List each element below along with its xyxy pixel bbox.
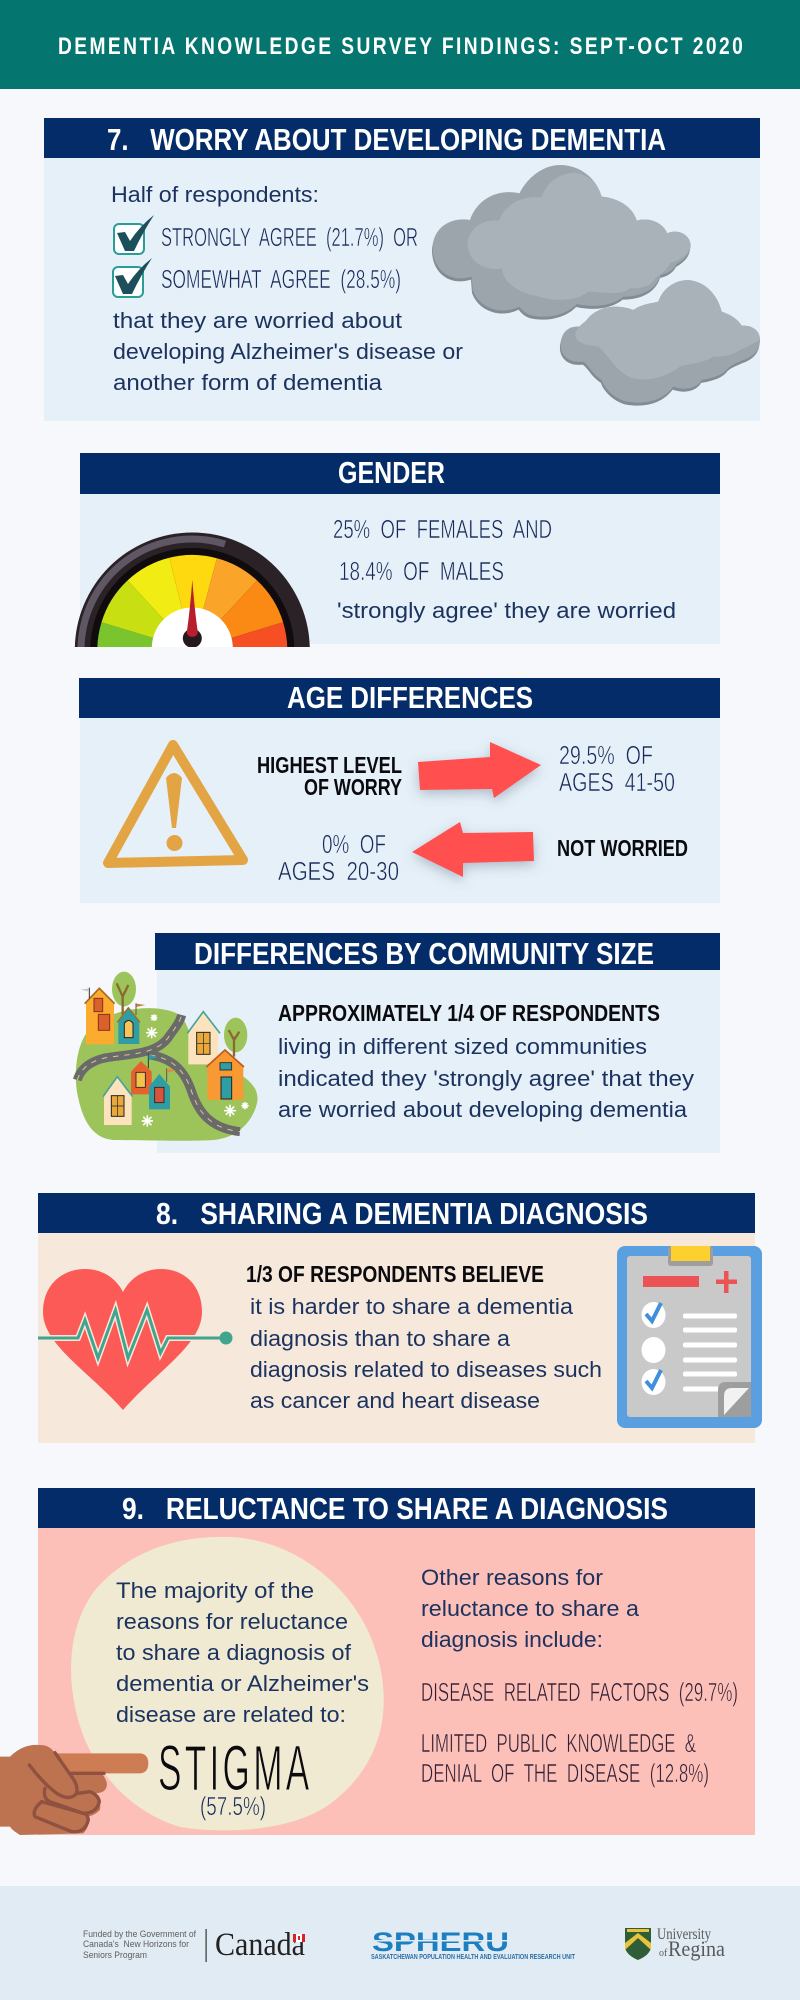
- panel: community size: [76, 933, 720, 1153]
- tree 1: [112, 972, 136, 1006]
- logo: Government of Canada: Canada: [215, 1927, 305, 1963]
- teal house: [118, 1008, 139, 1044]
- text: approximately 1/4: APPROXIMATELY 1/4 OF RESPONDENTS: [278, 1000, 660, 1026]
- text: worried about developing: [113, 308, 464, 395]
- text: majority of reasons: to share a diagnosis of: [116, 1640, 352, 1665]
- text: other reasons: Other reasons for: [421, 1565, 604, 1590]
- text: gender percentages: 18.4% OF MALES: [339, 556, 504, 586]
- logo: Government of Canada: Seniors Program: [83, 1950, 147, 1961]
- heading: section 7: 7. WORRY ABOUT DEVELOPING DEMENTIA: [107, 122, 666, 157]
- text: strongly agree: STRONGLY AGREE (21.7%) OR: [161, 222, 418, 252]
- panel: reluctance to share a diagnosis: [0, 1488, 755, 1835]
- text: diagnosis description: [250, 1294, 602, 1413]
- callout: stigma blob: [71, 1537, 384, 1830]
- heading: age differences: AGE DIFFERENCES: [287, 680, 533, 715]
- text: majority of reasons: reasons for reluctance: [116, 1609, 348, 1634]
- text: ages 20-30: AGES 20-30: [278, 856, 399, 886]
- heading: section 9: 9. RELUCTANCE TO SHARE A DIAGNOSIS: [122, 1491, 668, 1526]
- text: other reasons: reluctance to share a: [421, 1596, 640, 1621]
- title: DEMENTIA KNOWLEDGE SURVEY FINDINGS: SEPT-OCT 2020: [58, 32, 743, 60]
- logo: University of Regina: of: [659, 1948, 668, 1959]
- text: somewhat agree: SOMEWHAT AGREE (28.5%): [161, 264, 401, 294]
- text: gender percentages: 25% OF FEMALES AND: [333, 514, 552, 544]
- text: majority of reasons: The majority of the: [116, 1578, 314, 1603]
- arrow: right: [418, 742, 541, 798]
- flag and red house: [147, 1053, 150, 1068]
- text: worried about developing: that they are worried about: [113, 308, 403, 333]
- panel: worry about developing dementia: [44, 118, 760, 421]
- header banner: [0, 0, 800, 89]
- text: highest level of worry: OF WORRY: [304, 774, 402, 800]
- text: majority of reasons: [116, 1578, 369, 1727]
- text: majority of reasons: dementia or Alzheimer's: [116, 1671, 369, 1696]
- cream house 2: [104, 1077, 132, 1125]
- logo: University of Regina: Regina: [668, 1936, 725, 1961]
- text: stigma: STIGMA: [158, 1732, 310, 1804]
- text: community description: [278, 1034, 695, 1122]
- text: diagnosis description: it is harder to share a dementia: [250, 1294, 574, 1319]
- footer: [0, 1886, 800, 2000]
- icon: checkbox strongly agree: [114, 215, 154, 254]
- text: diagnosis description: as cancer and heart disease: [250, 1388, 540, 1413]
- icon: village: [76, 972, 258, 1141]
- heading: gender: GENDER: [338, 455, 445, 490]
- icon: pointing hand: [0, 1745, 148, 1835]
- text: ages 41-50: 29.5% OF: [559, 740, 653, 770]
- text: community description: are worried about developing dementia: [278, 1097, 687, 1122]
- panel: sharing a dementia diagnosis: [38, 1193, 762, 1443]
- text: not worried: NOT WORRIED: [557, 835, 688, 861]
- logo: Government of Canada: [83, 1927, 305, 1963]
- text: community description: indicated they 'strongly agree' that they: [278, 1066, 695, 1091]
- text: ages 20-30: [278, 829, 399, 886]
- text: gender percentages: [333, 514, 552, 586]
- text: ages 41-50: [559, 740, 675, 797]
- text: other reasons: diagnosis include:: [421, 1627, 603, 1652]
- icon: gauge: [74, 532, 310, 647]
- heading: community size: DIFFERENCES BY COMMUNITY SIZE: [194, 936, 654, 971]
- icon: checkbox somewhat agree: [113, 258, 152, 297]
- text: diagnosis description: diagnosis related to diseases such: [250, 1357, 602, 1382]
- logo: University of Regina: University: [657, 1926, 711, 1943]
- logo: University of Regina: [625, 1926, 725, 1961]
- text: strongly agree worried: 'strongly agree' they are worried: [337, 598, 676, 623]
- text: limited public knowledge: [421, 1728, 709, 1788]
- logo: Government of Canada: Funded by the Government of: [83, 1929, 196, 1940]
- tree 2: [224, 1018, 247, 1052]
- cream house: [188, 1012, 218, 1064]
- logo: SPHERU: SPHERU: [372, 1927, 509, 1957]
- heading: section 8: 8. SHARING A DEMENTIA DIAGNOSIS: [156, 1196, 648, 1231]
- teal house 2: [165, 1068, 168, 1082]
- text: worried about developing: developing Alzheimer's disease or: [113, 339, 464, 364]
- text: worried about developing: another form of dementia: [113, 370, 383, 395]
- orange house: [86, 1002, 114, 1044]
- logo: Government of Canada: Canada's New Horizons for: [83, 1939, 189, 1950]
- text: half of respondents: Half of respondents:: [111, 182, 319, 207]
- text: highest level of worry: HIGHEST LEVEL: [257, 752, 402, 778]
- logo: SPHERU: [371, 1927, 575, 1961]
- icon: storm cloud small: [560, 280, 760, 406]
- icon: storm cloud large: [432, 165, 691, 320]
- panel: gender: [74, 453, 720, 647]
- text: 57.5 percent: (57.5%): [200, 1791, 266, 1821]
- text: highest level of worry: [257, 752, 402, 800]
- text: ages 41-50: AGES 41-50: [559, 767, 675, 797]
- text: ages 20-30: 0% OF: [322, 829, 386, 859]
- text: 1/3 of respondents: 1/3 OF RESPONDENTS BELIEVE: [246, 1261, 544, 1287]
- text: majority of reasons: disease are related to:: [116, 1702, 346, 1727]
- arrow: left: [412, 822, 534, 877]
- text: community description: living in different sized communities: [278, 1034, 647, 1059]
- icon: clipboard: [617, 1246, 762, 1428]
- icon: warning triangle: [108, 745, 243, 863]
- text: diagnosis description: diagnosis than to share a: [250, 1326, 510, 1351]
- logo: SPHERU: SASKATCHEWAN POPULATION HEALTH AND EVALUATION RESEARCH UNIT: [371, 1952, 575, 1961]
- panel: age differences: [79, 678, 720, 903]
- orange striped house: [207, 1051, 243, 1100]
- icon: heart with pulse: [38, 1269, 232, 1410]
- text: other reasons: [421, 1565, 640, 1652]
- stars: [142, 1015, 248, 1126]
